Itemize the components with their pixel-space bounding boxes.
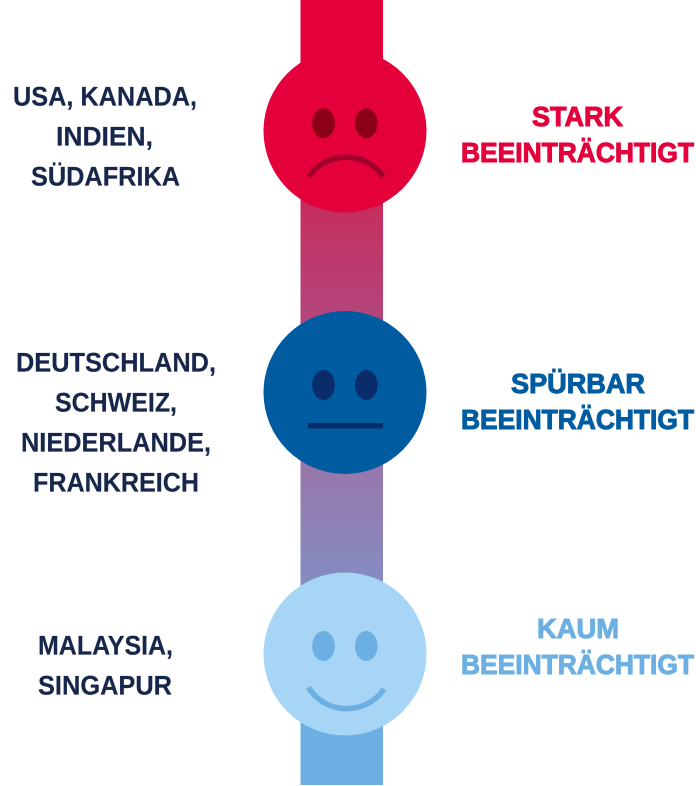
label: stark beeinträchtigt <box>461 101 694 168</box>
icon: happy face <box>264 572 426 736</box>
label: kaum beeinträchtigt: KAUM <box>537 613 619 644</box>
country list: barely affected: MALAYSIA, <box>38 630 173 660</box>
country list: strongly affected <box>13 82 197 192</box>
country list: barely affected: SINGAPUR <box>38 670 172 700</box>
vertical gradient bar <box>300 0 383 785</box>
country list: barely affected <box>38 630 173 700</box>
icon: sad face <box>264 50 426 212</box>
label: spürbar beeinträchtigt <box>461 368 694 435</box>
icon: neutral face <box>264 311 426 474</box>
label: stark beeinträchtigt: STARK <box>532 101 623 132</box>
label: spürbar beeinträchtigt: SPÜRBAR <box>511 368 645 399</box>
country list: noticeably affected: FRANKREICH <box>33 468 199 498</box>
country list: strongly affected: USA, KANADA, <box>13 82 197 112</box>
country list: strongly affected: SÜDAFRIKA <box>31 162 180 192</box>
label: kaum beeinträchtigt <box>461 613 694 680</box>
country list: noticeably affected: SCHWEIZ, <box>55 388 177 418</box>
country list: noticeably affected: NIEDERLANDE, <box>21 428 211 458</box>
country list: noticeably affected <box>16 348 216 498</box>
country list: noticeably affected: DEUTSCHLAND, <box>16 348 216 378</box>
country list: strongly affected: INDIEN, <box>56 122 153 152</box>
